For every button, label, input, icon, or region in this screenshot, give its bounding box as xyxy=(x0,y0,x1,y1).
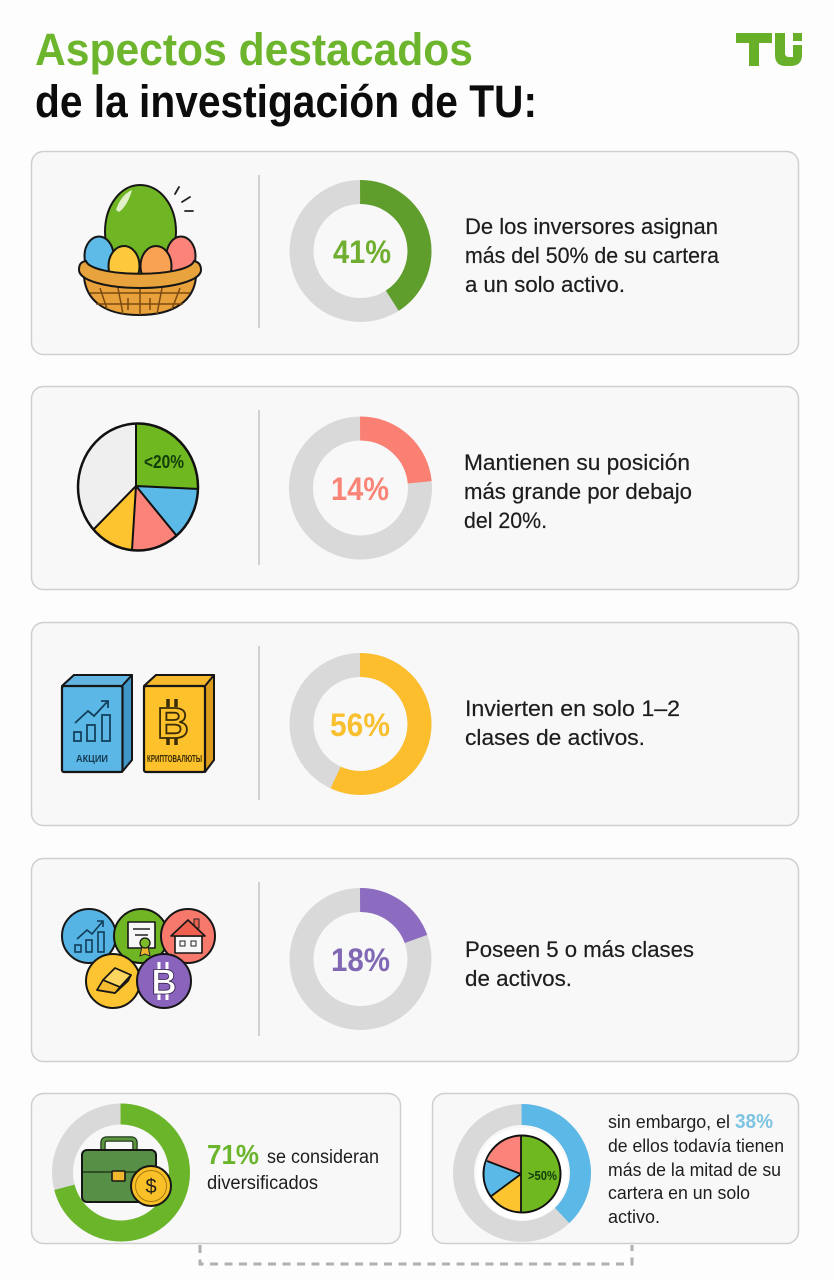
text: 38%: sin embargo, el xyxy=(608,1112,730,1132)
title xyxy=(35,24,537,127)
text: 14% description: más grande por debajo xyxy=(464,479,692,504)
text: 71%: 71% xyxy=(207,1139,259,1170)
panel: 38% single asset xyxy=(432,1094,798,1244)
text: 38% xyxy=(608,1111,784,1227)
icon: bitcoin coin: B xyxy=(151,963,177,1002)
text: 14% description: del 20%. xyxy=(464,508,547,533)
panel: 56% xyxy=(32,622,798,826)
icon: pie over 50%: >50% xyxy=(528,1169,557,1183)
value: 18%: 18% xyxy=(331,942,390,978)
text: 71% xyxy=(207,1139,379,1194)
logo: TU xyxy=(736,33,802,66)
donut: 38% xyxy=(464,1114,580,1232)
donut: 14% xyxy=(301,428,420,548)
panel: 41% xyxy=(32,152,798,354)
donut: 56% xyxy=(302,665,420,783)
icon: pie chart xyxy=(77,423,199,551)
icon: asset boxes: АКЦИИ xyxy=(76,754,108,765)
value: 41%: 41% xyxy=(333,234,391,270)
value: 14%: 14% xyxy=(331,471,389,507)
text: 38%: más de la mitad de su xyxy=(608,1160,781,1180)
text: 41% description: a un solo activo. xyxy=(465,272,625,297)
icon: briefcase with coin: $ xyxy=(145,1176,157,1198)
icon: asset circles xyxy=(62,909,215,1008)
panel: 18% xyxy=(32,858,798,1062)
icon: bitcoin on box: B xyxy=(157,699,189,748)
icon: gold bar xyxy=(97,968,131,993)
text: 14% description xyxy=(464,450,692,533)
text: 56% description: clases de activos. xyxy=(465,725,645,750)
text: 71%: se consideran xyxy=(267,1147,379,1168)
icon: pie over 50% xyxy=(476,1128,568,1220)
text: 38%: de ellos todavía tienen xyxy=(608,1136,784,1156)
icon: pie chart: <20% xyxy=(144,452,184,472)
text: 38%: cartera en un solo xyxy=(608,1183,750,1203)
donut: 18% xyxy=(302,900,420,1018)
text: 38%: activo. xyxy=(608,1207,660,1227)
title: Aspectos destacados xyxy=(35,24,473,75)
title: de la investigación de TU: xyxy=(35,76,537,127)
panel: 14% xyxy=(32,386,798,590)
text: 41% description: De los inversores asignan xyxy=(465,214,718,239)
text: 41% description: más del 50% de su cartera xyxy=(465,243,720,268)
text: 71%: diversificados xyxy=(207,1173,318,1194)
icon: briefcase with coin xyxy=(82,1139,171,1206)
text: 14% description: Mantienen su posición xyxy=(464,450,690,475)
text: 18% description: de activos. xyxy=(465,966,572,991)
donut: 71% xyxy=(62,1114,180,1231)
dashed connector xyxy=(200,1245,632,1264)
icon: eggs in basket xyxy=(79,185,201,315)
icon: asset boxes xyxy=(62,675,214,772)
value: 56%: 56% xyxy=(330,707,390,743)
text: 41% description xyxy=(465,214,720,297)
text: 38%: 38% xyxy=(735,1111,773,1133)
text: 18% description xyxy=(465,937,694,991)
text: 56% description xyxy=(465,696,680,750)
icon: asset boxes: КРИПТОВАЛЮТЫ xyxy=(147,754,202,765)
donut: 41% xyxy=(302,192,420,310)
panel: 71% diversified xyxy=(32,1094,400,1244)
text: 18% description: Poseen 5 o más clases xyxy=(465,937,694,962)
text: 56% description: Invierten en solo 1–2 xyxy=(465,696,680,721)
